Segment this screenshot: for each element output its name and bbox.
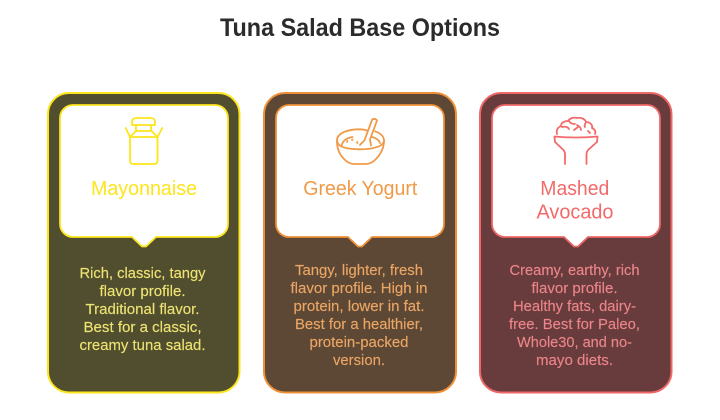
heading: greek yogurt: Greek Yogurt	[303, 178, 418, 200]
description: mayonnaise: Best for a classic,	[84, 320, 202, 336]
title: Tuna Salad Base Options	[220, 14, 500, 42]
description: mayonnaise: Traditional flavor.	[86, 302, 200, 318]
panel: mashed avocado	[480, 93, 672, 392]
description: greek yogurt: flavor profile. High in	[290, 281, 428, 297]
panel: greek yogurt	[264, 93, 456, 392]
heading: mashed avocado	[536, 178, 614, 223]
description: mashed avocado: flavor profile.	[532, 281, 618, 297]
icon: mashed avocado bowl	[554, 118, 598, 164]
description: greek yogurt: protein-packed	[310, 335, 408, 351]
description: mashed avocado: Creamy, earthy, rich	[510, 263, 640, 279]
description: greek yogurt: Tangy, lighter, fresh	[295, 263, 423, 279]
description: mayonnaise: flavor profile.	[100, 284, 186, 300]
description: greek yogurt: Best for a healthier,	[295, 317, 423, 333]
header card: mayonnaise	[60, 105, 228, 246]
description: mashed avocado	[509, 263, 640, 369]
description: mashed avocado: free. Best for Paleo,	[509, 317, 640, 333]
description: mayonnaise: Rich, classic, tangy	[80, 266, 206, 282]
header card: mashed avocado	[492, 105, 660, 246]
heading: mashed avocado: Avocado	[536, 201, 614, 223]
panel background: mayonnaise	[48, 93, 240, 392]
icon: bowl with spoon	[337, 119, 384, 164]
panel background: mashed avocado	[480, 93, 672, 392]
icon: milk jug	[126, 118, 162, 164]
description: mayonnaise	[80, 266, 206, 354]
description: mashed avocado: Whole30, and no-	[517, 335, 632, 351]
description: greek yogurt	[290, 263, 428, 369]
panel background: greek yogurt	[264, 93, 456, 392]
heading: mashed avocado: Mashed	[540, 178, 609, 200]
header card: greek yogurt	[276, 105, 444, 246]
description: mashed avocado: Healthy fats, dairy-	[513, 299, 636, 315]
description: mashed avocado: mayo diets.	[536, 353, 613, 369]
description: greek yogurt: version.	[333, 353, 385, 369]
heading: mayonnaise: Mayonnaise	[91, 178, 197, 200]
description: greek yogurt: protein, lower in fat.	[294, 299, 424, 315]
panel: mayonnaise	[48, 93, 240, 392]
description: mayonnaise: creamy tuna salad.	[80, 338, 206, 354]
